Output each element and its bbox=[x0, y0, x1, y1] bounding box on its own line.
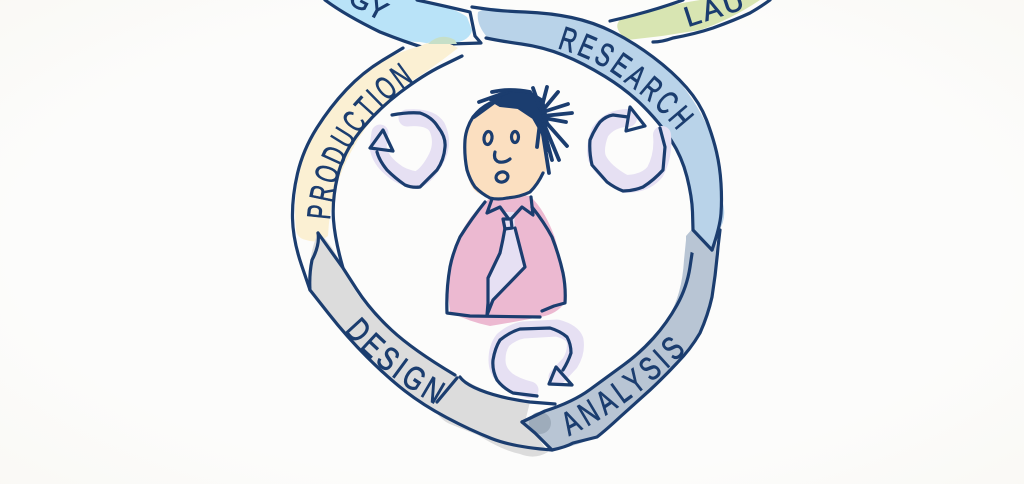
band: top-right launch stage bbox=[610, 0, 770, 42]
eyes bbox=[483, 131, 493, 145]
band: design bbox=[308, 231, 557, 456]
band: research bbox=[470, 5, 724, 254]
band: analysis bbox=[520, 228, 722, 452]
icon: bottom cycle arrow bbox=[493, 328, 575, 396]
mouth bbox=[495, 171, 509, 183]
band: top-left cut-off stage bbox=[323, 0, 481, 48]
character: person bbox=[447, 87, 572, 326]
collar bbox=[487, 197, 533, 218]
band: production bbox=[290, 36, 464, 292]
tie bbox=[487, 212, 525, 315]
label: research: RESEARCH bbox=[558, 26, 694, 130]
nose bbox=[494, 152, 510, 162]
body bbox=[447, 195, 566, 326]
icon: right cycle arrow bbox=[590, 107, 665, 191]
label: design: DESIGN bbox=[346, 316, 446, 404]
label: analysis: ANALYSIS bbox=[564, 337, 684, 437]
face bbox=[464, 99, 548, 200]
hair bbox=[474, 87, 572, 173]
icon: left cycle arrow bbox=[370, 113, 445, 187]
label: production: PRODUCTION bbox=[306, 62, 413, 219]
